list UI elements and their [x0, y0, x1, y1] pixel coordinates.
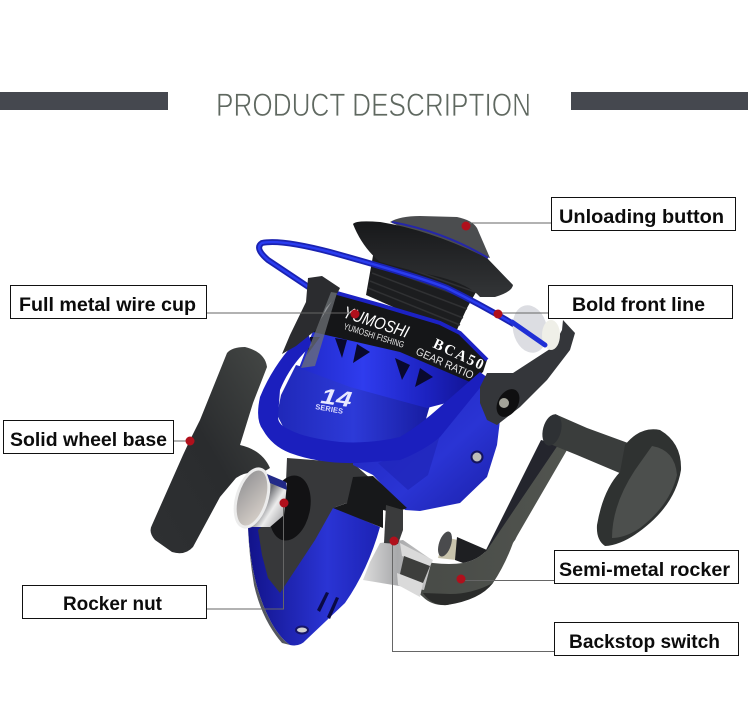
- series badge: 14: [319, 383, 353, 412]
- mechanism parts: [333, 476, 407, 528]
- illustration: fishing reel: SERIES: [315, 402, 344, 416]
- switch post: [384, 505, 403, 544]
- rear vents: [317, 592, 339, 619]
- callout: Full metal wire cup: [10, 286, 360, 318]
- callout: Unloading button: Unloading button: [559, 206, 724, 228]
- callout: Solid wheel base: Solid wheel base: [10, 429, 167, 451]
- callout: Full metal wire cup: Full metal wire cup: [19, 294, 196, 316]
- callout: Bold front line: Bold front line: [572, 294, 705, 316]
- blue skirt: [299, 331, 482, 408]
- callout: Backstop switch: [390, 536, 738, 656]
- spindle plates: [397, 543, 433, 597]
- body screw: [472, 452, 482, 462]
- skirt vents: [307, 337, 433, 387]
- right body housing: [353, 376, 500, 511]
- rear blue housing: [248, 507, 380, 645]
- brand text: YUMOSHI: [341, 303, 412, 342]
- callout: Backstop switch: Backstop switch: [569, 631, 720, 653]
- spool knob: [390, 216, 490, 258]
- grey bracket: [258, 458, 372, 593]
- crank paddle knob: [597, 429, 681, 546]
- callout: Rocker nut: Rocker nut: [63, 593, 162, 615]
- wire bail: [259, 242, 545, 344]
- rocker arm: [400, 445, 567, 605]
- spindle: [363, 540, 432, 590]
- illustration: fishing reel: [151, 216, 681, 645]
- title: PRODUCT DESCRIPTION: [216, 87, 531, 123]
- illustration: fishing reel: GEAR RATIO: [414, 346, 476, 382]
- black collar: [264, 472, 316, 544]
- rocker bottom shading: [423, 583, 493, 605]
- rear screw: [296, 626, 308, 634]
- callout: Semi-metal rocker: [456, 550, 738, 584]
- header bar left: [0, 92, 168, 110]
- rocker stud: [438, 537, 458, 560]
- callout: Solid wheel base: [4, 420, 194, 454]
- rotor band: [313, 293, 487, 382]
- left bail arm: [282, 276, 340, 354]
- illustration: fishing reel: BCA50: [430, 336, 486, 373]
- callout: Semi-metal rocker: Semi-metal rocker: [559, 559, 730, 581]
- spool body: [366, 250, 480, 334]
- illustration: fishing reel: YUMOSHI FISHING: [342, 321, 405, 350]
- callout: Unloading button: [462, 198, 736, 230]
- header bar right: [571, 92, 748, 110]
- chrome nut: [250, 469, 287, 527]
- roller: [508, 302, 552, 356]
- crank knob stem: [545, 414, 628, 474]
- spool flange: [353, 221, 513, 297]
- left handle grip: [151, 347, 270, 553]
- right bail arm: [480, 320, 575, 425]
- crank strut: [485, 440, 560, 570]
- callout: Rocker nut: [22, 498, 288, 618]
- bail rod: [301, 292, 337, 368]
- blue horseshoe arm: [258, 330, 488, 463]
- inner body: [277, 365, 430, 450]
- callout: Bold front line: [494, 286, 732, 318]
